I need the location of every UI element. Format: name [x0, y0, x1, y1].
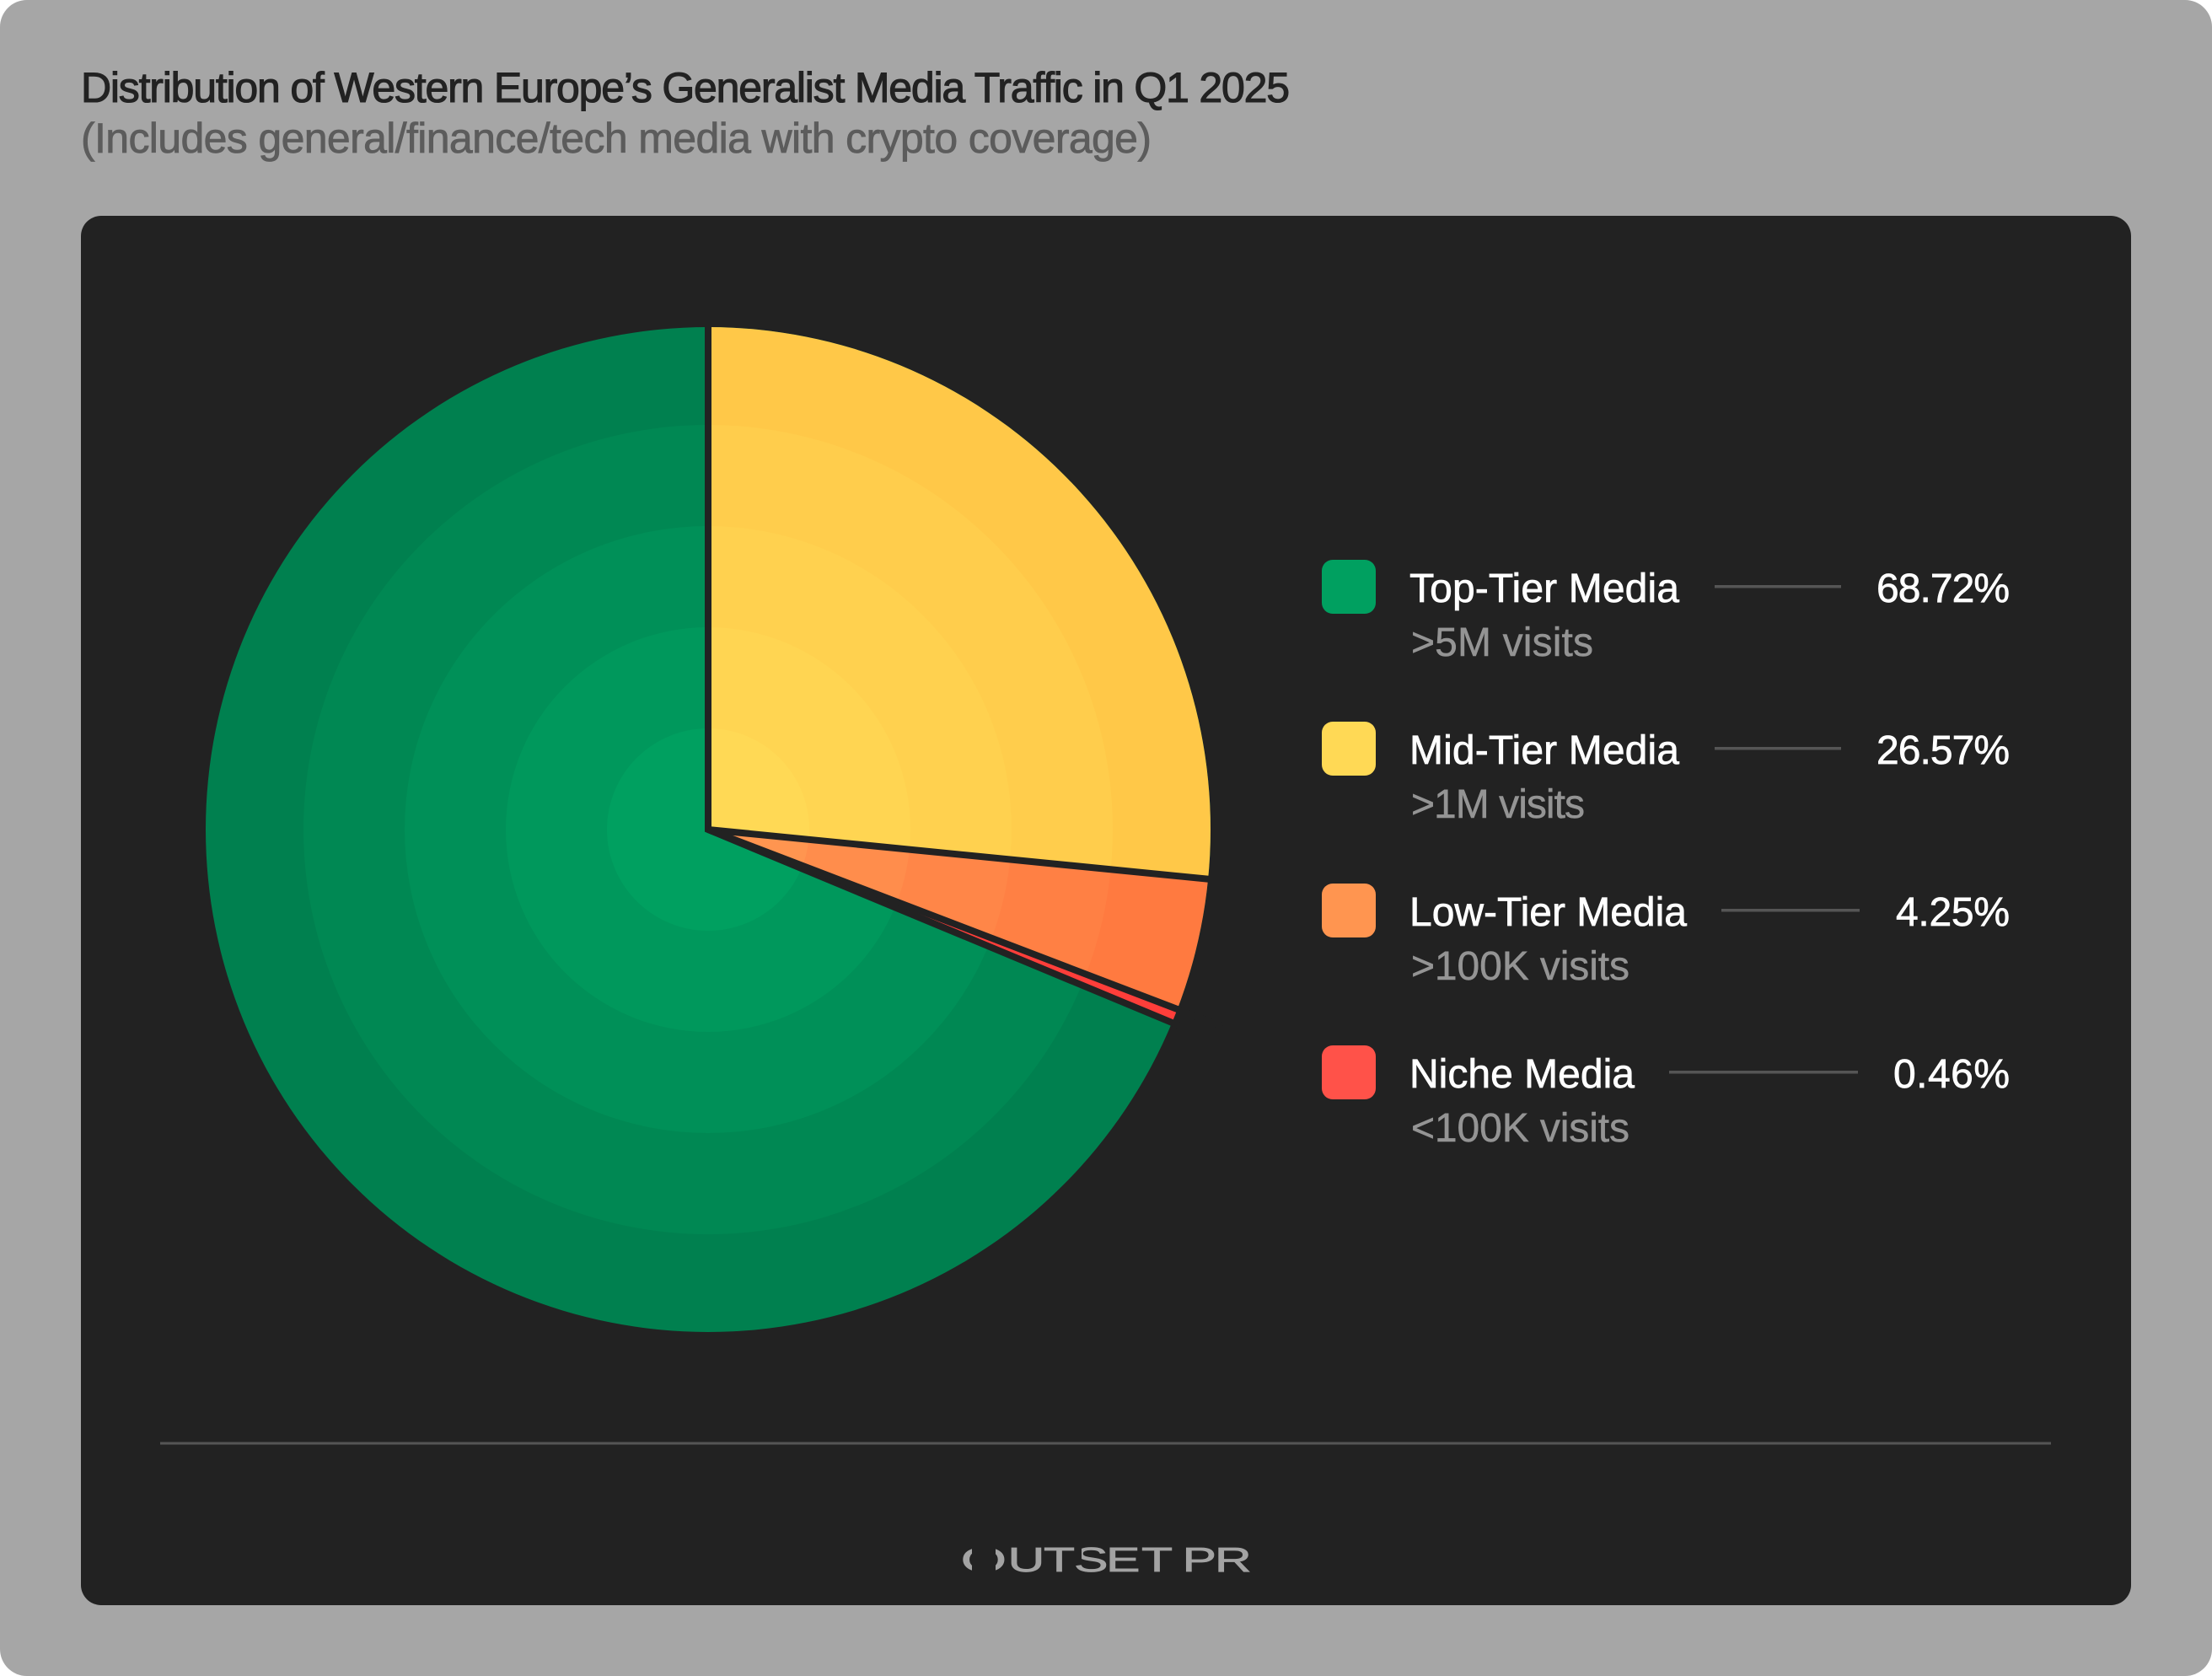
legend item: low-tier: 4.25%	[1896, 890, 2010, 935]
legend item: mid-tier: 26.57%	[1876, 728, 2010, 773]
pie chart	[206, 317, 1222, 1332]
title: Distribution of Western Europe’s Generalist Media Traffic in Q1 2025	[81, 64, 1290, 111]
heading block	[81, 64, 1290, 162]
footer divider	[160, 1442, 2051, 1445]
legend item: top-tier: 68.72%	[1876, 567, 2010, 611]
panel: chart area	[0, 216, 2131, 1605]
legend item: mid-tier: Mid-Tier Media	[1409, 728, 1679, 773]
legend item: niche: <100K visits	[1411, 1106, 1629, 1151]
slice separators	[708, 317, 1222, 1027]
legend item: mid-tier: >1M visits	[1411, 782, 1585, 827]
legend item: top-tier: >5M visits	[1411, 620, 1593, 665]
legend item: niche: Niche Media	[1409, 1052, 1635, 1097]
legend item: top-tier	[1322, 560, 2010, 665]
legend item: low-tier: Low-Tier Media	[1409, 890, 1687, 935]
subtitle: (Includes general/finance/tech media with crypto coverage)	[81, 115, 1152, 162]
logo: Outset PR: UTSET PR	[0, 1540, 1252, 1579]
legend item: top-tier: Top-Tier Media	[1409, 567, 1679, 611]
legend item: niche	[1322, 1045, 2010, 1151]
slice: niche media	[919, 914, 1177, 1020]
slice: low-tier media	[732, 835, 1208, 1007]
slice: top-tier media	[206, 327, 1211, 1332]
legend item: mid-tier	[1322, 722, 2010, 827]
legend	[1322, 560, 2010, 1151]
legend item: niche: 0.46%	[1893, 1052, 2010, 1097]
legend item: low-tier: >100K visits	[1411, 944, 1629, 989]
slice: mid-tier media	[711, 327, 1211, 876]
legend item: low-tier	[1322, 884, 2010, 989]
logo: Outset PR: O	[961, 1541, 1007, 1579]
